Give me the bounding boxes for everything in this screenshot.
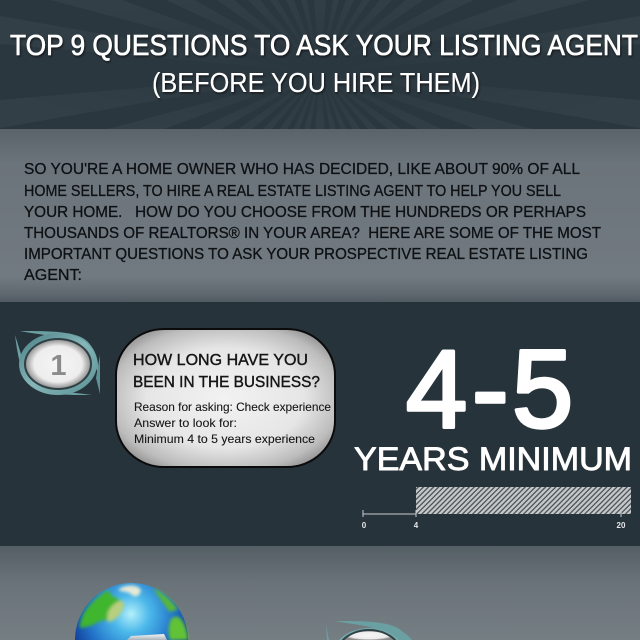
icon: number 1 badge <box>15 331 100 395</box>
question heading <box>133 352 320 391</box>
big number: 4-5 <box>406 328 573 451</box>
bar chart: years of experience: 20 <box>617 521 626 530</box>
panel: question 2 <box>0 546 640 640</box>
panel: introduction <box>0 129 640 303</box>
question heading: HOW LONG HAVE YOU <box>133 352 308 369</box>
title: (BEFORE YOU HIRE THEM) <box>152 67 480 98</box>
header band <box>0 0 640 130</box>
big number caption: YEARS MINIMUM <box>354 441 632 477</box>
panel: question 1 <box>0 302 640 546</box>
callout: question bubble <box>116 329 335 467</box>
intro text: THOUSANDS OF REALTORS® IN YOUR AREA? HERE ARE SOME OF THE MOST <box>24 225 601 242</box>
bar chart: years of experience <box>362 487 631 530</box>
answer text: Reason for asking: Check experience <box>134 400 331 414</box>
title <box>10 30 638 98</box>
icon: globe <box>75 583 188 640</box>
intro text: SO YOU'RE A HOME OWNER WHO HAS DECIDED, LIKE ABOUT 90% OF ALL <box>24 161 580 178</box>
intro text: HOME SELLERS, TO HIRE A REAL ESTATE LISTING AGENT TO HELP YOU SELL <box>24 183 561 200</box>
icon: number 2 badge <box>326 621 412 640</box>
intro text <box>24 161 601 284</box>
intro text: AGENT: <box>24 267 82 284</box>
intro text: IMPORTANT QUESTIONS TO ASK YOUR PROSPECTIVE REAL ESTATE LISTING <box>24 246 588 263</box>
answer text: Answer to look for: <box>134 416 237 430</box>
bar chart: years of experience: 4 <box>414 521 419 530</box>
question heading: BEEN IN THE BUSINESS? <box>133 374 320 391</box>
intro text: YOUR HOME. HOW DO YOU CHOOSE FROM THE HUNDREDS OR PERHAPS <box>24 204 586 221</box>
bar chart: years of experience: 0 <box>362 521 367 530</box>
answer text <box>134 400 331 446</box>
answer text: Minimum 4 to 5 years experience <box>134 432 315 446</box>
icon: number 1 badge: 1 <box>50 350 67 382</box>
